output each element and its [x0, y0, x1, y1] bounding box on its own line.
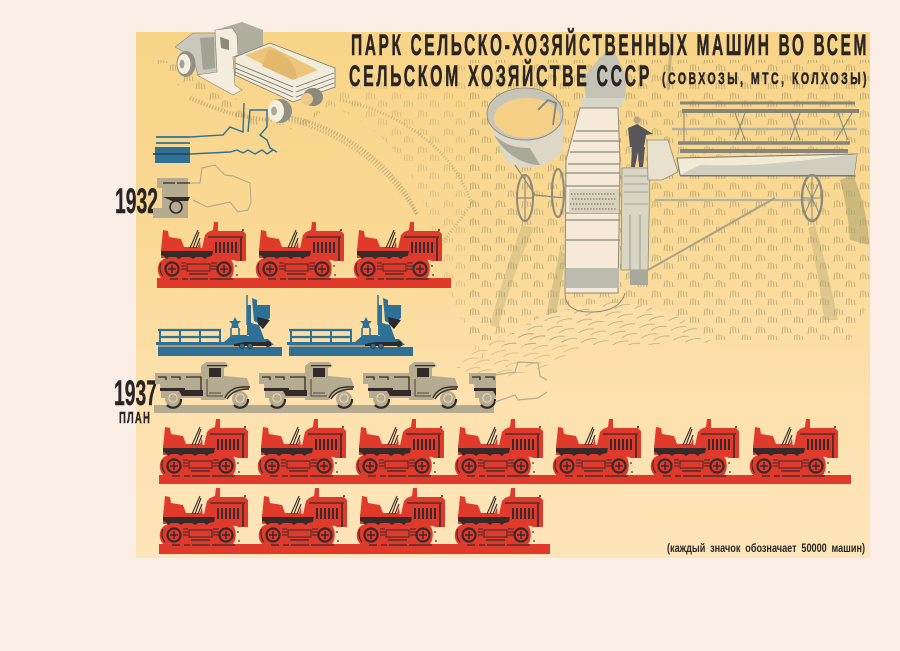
year label 1937 план: 1937 — [114, 374, 157, 413]
grain hopper — [487, 88, 563, 168]
tractor 2 — [256, 222, 344, 281]
steps — [647, 140, 678, 180]
panel: yellow illustrated field — [136, 32, 870, 558]
1937: trucks row — [154, 362, 564, 413]
illustration: wheat field with swaths — [190, 32, 870, 380]
truck 1 — [155, 362, 250, 408]
tractor 1 — [160, 419, 248, 478]
truck bar 1937 — [154, 405, 494, 413]
reel — [672, 103, 859, 151]
tractor 1 — [158, 222, 246, 281]
1937: tractors row 2 — [159, 488, 550, 554]
tractor 6 — [651, 419, 739, 478]
1932: partial combine icon — [153, 103, 277, 163]
truck 2 — [259, 362, 354, 408]
truck 3 — [363, 362, 458, 408]
tractor 3 — [356, 419, 444, 478]
1932: partial truck icon — [153, 165, 251, 218]
tractor 4 — [455, 419, 543, 478]
partial truck — [469, 361, 548, 409]
1932: tractors row — [157, 222, 451, 288]
hopper wheels — [515, 165, 565, 221]
illustration: loaded farm truck — [150, 22, 335, 130]
tractor 5 — [553, 419, 641, 478]
tractor 2 — [259, 488, 347, 547]
title — [349, 28, 869, 93]
tractor bar long — [159, 475, 851, 484]
1937: tractors row 1 — [159, 419, 851, 484]
tractor bar 1932 — [157, 278, 451, 288]
cutting platform — [677, 154, 857, 176]
tractor 3 — [357, 488, 445, 547]
year label 1937 план — [114, 374, 157, 427]
central elevator body — [565, 98, 650, 312]
1937: combines row — [156, 295, 413, 356]
year label 1932: 1932 — [115, 182, 158, 221]
tractor 7 — [750, 419, 838, 478]
tractor 1 — [160, 488, 248, 547]
operator figure — [628, 116, 653, 167]
tractor 2 — [258, 419, 346, 478]
axle and front wheel — [648, 175, 822, 270]
tractor 4 — [455, 488, 543, 547]
tractor bar short — [159, 544, 550, 554]
upper unit — [583, 53, 627, 98]
combine 2 — [287, 295, 413, 356]
combine 1 — [156, 295, 282, 356]
year label 1937 план: ПЛАН — [119, 410, 151, 427]
tractor 3 — [354, 222, 442, 281]
illustration: combine harvester — [487, 53, 859, 312]
